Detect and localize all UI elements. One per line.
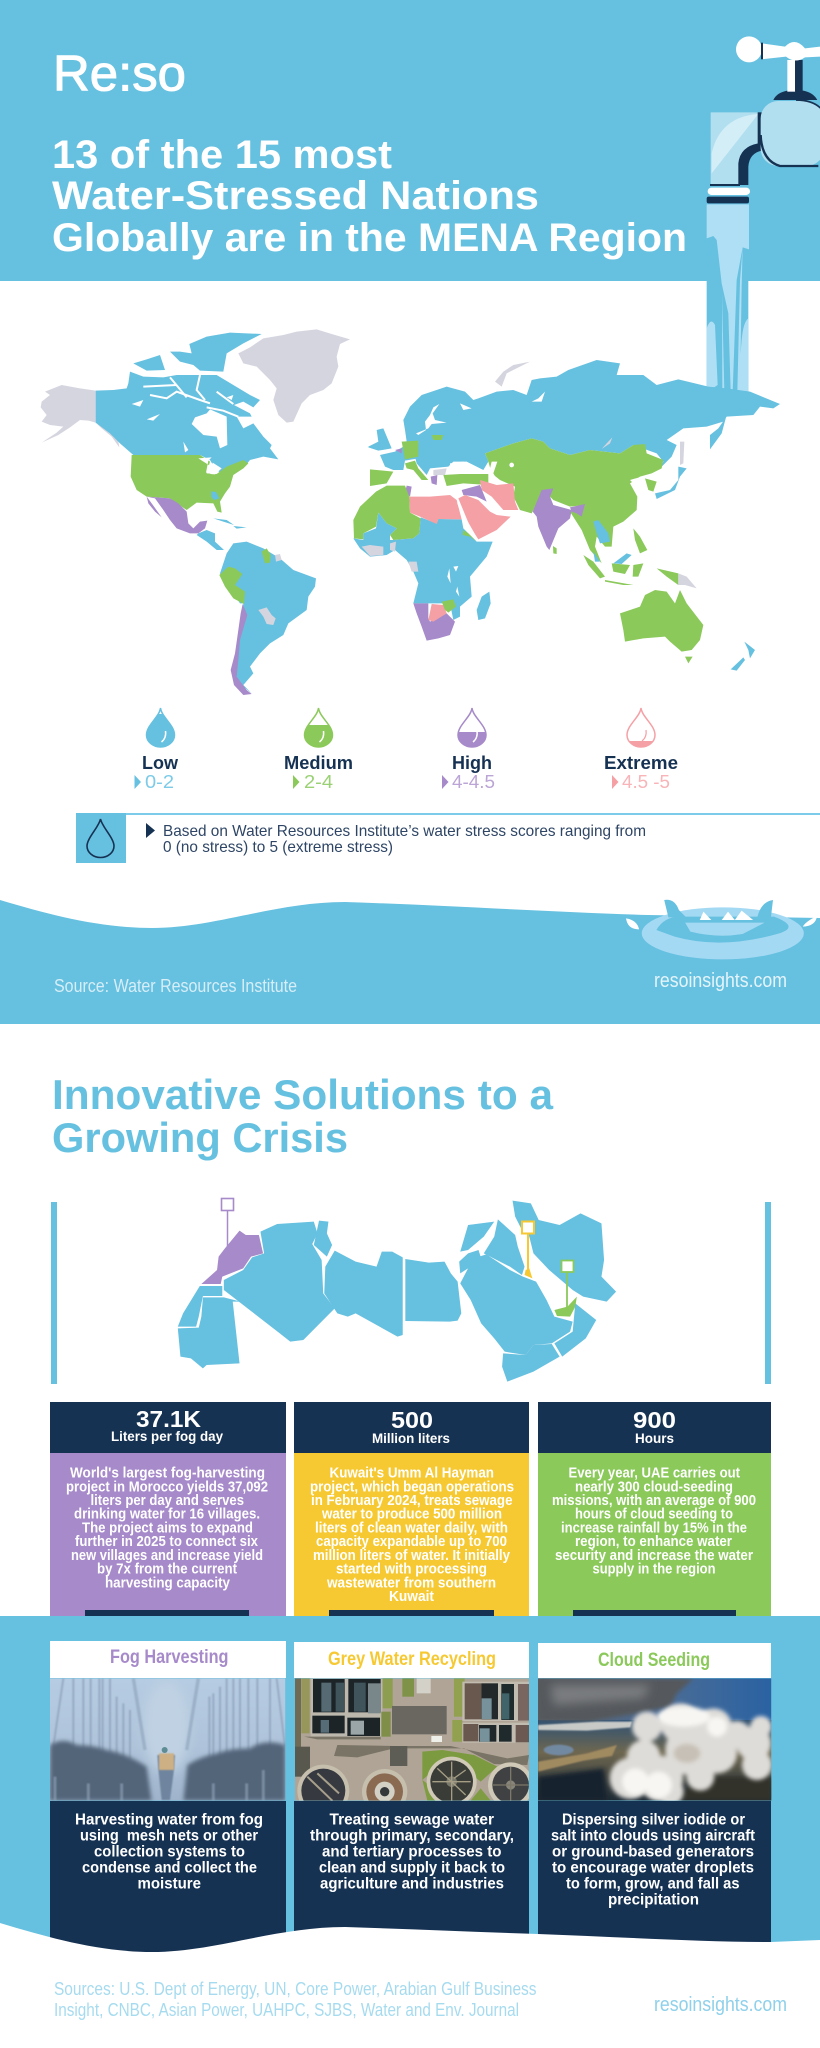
stat card: grey water: 500	[391, 1407, 433, 1433]
stat card: cloud seeding: 900	[633, 1407, 676, 1433]
wave footer panel: resoinsights.com	[654, 970, 787, 992]
heading: innovative solutions: Growing Crisis	[52, 1114, 348, 1161]
marker: Kuwait	[522, 1222, 534, 1273]
stat card: grey water: Kuwait	[389, 1589, 434, 1605]
header band	[0, 0, 820, 281]
description: fog harvesting: collection systems to	[94, 1844, 245, 1860]
sources	[54, 1979, 536, 2020]
stat card: fog: The project aims to expand	[82, 1520, 253, 1536]
sources: Insight, CNBC, Asian Power, UAHPC, SJBS, Water and Env. Journal	[54, 2000, 519, 2020]
white wave over band bottom	[0, 1923, 820, 2048]
stat card: grey water: started with processing	[336, 1562, 487, 1578]
stat card: cloud seeding	[538, 1402, 771, 1618]
icon: water splash	[626, 900, 817, 959]
solution card: cloud seeding: Cloud Seeding	[598, 1650, 710, 1671]
legend: extreme stress: Extreme	[604, 753, 678, 773]
stat card: cloud seeding: hours of cloud seeding to	[575, 1506, 733, 1522]
marker: UAE	[562, 1260, 574, 1310]
description: cloud seeding: to form, grow, and fall as	[566, 1876, 740, 1892]
photo: clouds from above	[538, 1678, 772, 1805]
map: Americas	[41, 329, 350, 695]
description: grey water recycling: Treating sewage water	[330, 1812, 494, 1828]
stat card: grey water: Million liters	[372, 1430, 450, 1446]
stat card: cloud seeding: supply in the region	[592, 1562, 716, 1578]
description: cloud seeding: precipitation	[608, 1892, 699, 1908]
website: resoinsights.com	[654, 1994, 787, 2016]
description: cloud seeding: to encourage water droplets	[552, 1860, 754, 1876]
stat card: grey water: wastewater from southern	[326, 1576, 496, 1592]
stat card: grey water: project, which began operations	[310, 1480, 514, 1496]
description: grey water recycling: through primary, secondary,	[310, 1828, 514, 1844]
stat card: fog: World's largest fog-harvesting	[70, 1466, 265, 1482]
solution card: fog harvesting	[50, 1641, 286, 1960]
stat card: grey water: Kuwait's Umm Al Hayman	[330, 1466, 494, 1482]
legend: high stress: High	[452, 753, 492, 773]
icon: outlined drop	[87, 819, 114, 858]
wave footer panel: Source: Water Resources Institute	[54, 976, 297, 996]
logo: Re:so: Re:so	[53, 46, 186, 102]
stat card: cloud seeding: nearly 300 cloud-seeding	[575, 1480, 733, 1496]
map: Europe, Africa, Asia, Oceania	[353, 360, 780, 671]
description: fog harvesting: using mesh nets or other	[80, 1828, 258, 1844]
description: fog harvesting: Harvesting water from fog	[75, 1812, 263, 1828]
callout: score note: 0 (no stress) to 5 (extreme stress)	[163, 839, 393, 856]
legend: medium stress: Medium	[284, 753, 353, 773]
title: Water-Stressed Nations	[52, 174, 539, 218]
description: grey water recycling: and tertiary processes to	[322, 1844, 502, 1860]
photo: foggy bridge	[50, 1678, 285, 1801]
wave footer panel	[0, 900, 820, 1024]
description: cloud seeding: or ground-based generators	[552, 1844, 754, 1860]
legend: low stress	[134, 708, 179, 792]
description: grey water recycling: agriculture and industries	[320, 1876, 504, 1892]
photo: treatment plant	[295, 1678, 529, 1801]
stat card: fog: new villages and increase yield	[71, 1548, 263, 1564]
stat card: fog: by 7x from the current	[97, 1562, 237, 1578]
description: fog harvesting	[50, 1801, 286, 1960]
stat card: grey water: liters of clean water daily, with	[315, 1520, 508, 1536]
stat card: cloud seeding: security and increase the water	[555, 1548, 753, 1564]
legend: high stress	[442, 708, 495, 792]
heading: innovative solutions: Innovative Solutions to a	[52, 1071, 554, 1118]
stat card: fog: harvesting capacity	[105, 1576, 230, 1592]
description: cloud seeding: salt into clouds using aircraft	[551, 1828, 755, 1844]
description: cloud seeding	[538, 1801, 771, 1960]
stat card: grey water: million liters of water. It initially	[313, 1548, 510, 1564]
callout: score note	[76, 813, 820, 863]
solution card: grey water recycling: Grey Water Recycling	[328, 1649, 496, 1670]
description: fog harvesting: moisture	[138, 1876, 201, 1892]
legend: low stress: Low	[142, 753, 179, 773]
stat card: cloud seeding: region, to enhance water	[575, 1534, 732, 1550]
legend: extreme stress	[604, 708, 678, 792]
title: Globally are in the MENA Region	[52, 216, 687, 260]
solution card: grey water recycling	[294, 1642, 533, 1960]
legend: medium stress: 2-4	[304, 772, 333, 792]
world map: water stress by country	[41, 329, 780, 695]
blue band behind solution cards	[0, 1616, 820, 1966]
legend: low stress: 0-2	[145, 772, 174, 792]
callout: score note: Based on Water Resources Institute’s water stress scores ranging from	[163, 823, 646, 840]
stat card: cloud seeding: Every year, UAE carries out	[568, 1466, 740, 1482]
stat card: cloud seeding: missions, with an average of 900	[552, 1493, 756, 1509]
stat card: fog: project in Morocco yields 37,092	[66, 1480, 268, 1496]
stat card: cloud seeding: Hours	[635, 1430, 674, 1446]
legend: extreme stress: 4.5 -5	[622, 772, 670, 792]
description: grey water recycling: clean and supply it back to	[319, 1860, 505, 1876]
stat card: grey water: capacity expandable up to 700	[316, 1534, 507, 1550]
icon: water stream	[707, 204, 749, 392]
marker: Morocco	[222, 1198, 234, 1248]
stat card: fog: further in 2025 to connect six	[75, 1534, 258, 1550]
legend: high stress: 4-4.5	[452, 772, 495, 792]
stat card: grey water	[294, 1402, 529, 1618]
stat card: grey water: water to produce 500 million	[321, 1506, 502, 1522]
solution card: cloud seeding	[538, 1643, 772, 1960]
stat card: grey water: in February 2024, treats sewage	[311, 1493, 512, 1509]
stat card: fog	[50, 1402, 286, 1618]
description: grey water recycling	[294, 1801, 529, 1960]
heading: innovative solutions	[52, 1071, 554, 1161]
stat card: fog: Liters per fog day	[111, 1428, 223, 1444]
stat card: fog: drinking water for 16 villages.	[74, 1506, 260, 1522]
title: 13 of the 15 most	[52, 133, 392, 177]
description: fog harvesting: condense and collect the	[82, 1860, 257, 1876]
MENA map	[51, 1198, 771, 1384]
icon: faucet	[707, 36, 820, 203]
stat card: cloud seeding: increase rainfall by 15% in the	[561, 1520, 747, 1536]
stat card: fog: liters per day and serves	[90, 1493, 244, 1509]
solution card: fog harvesting: Fog Harvesting	[110, 1647, 228, 1668]
title	[52, 133, 687, 260]
description: cloud seeding: Dispersing silver iodide or	[562, 1812, 745, 1828]
legend: medium stress	[284, 708, 353, 792]
stat card: fog: 37.1K	[136, 1406, 201, 1432]
sources: Sources: U.S. Dept of Energy, UN, Core Power, Arabian Gulf Business	[54, 1979, 536, 1999]
